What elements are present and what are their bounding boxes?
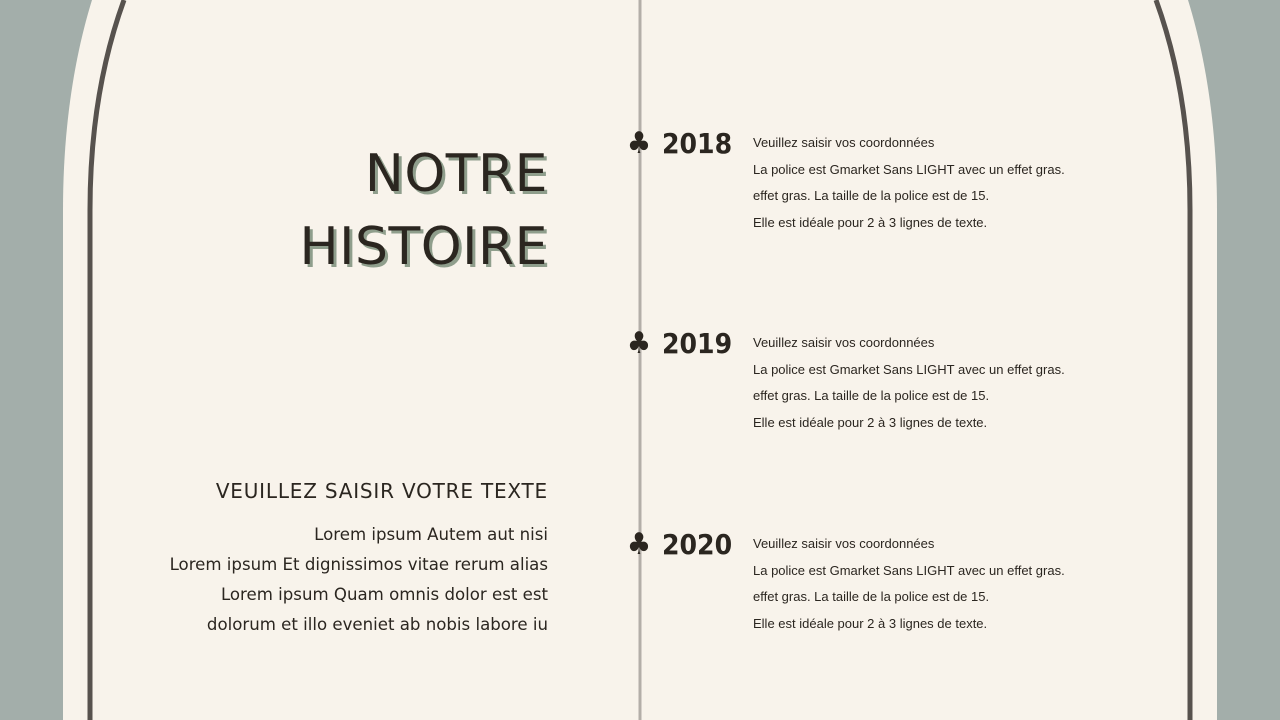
year 2018 xyxy=(627,126,732,161)
desc 2018: effet gras. La taille de la police est de 15. xyxy=(753,188,989,203)
year 2018: ♣ xyxy=(627,126,651,161)
desc 2018: La police est Gmarket Sans LIGHT avec un effet gras. xyxy=(753,162,1065,177)
desc 2019: La police est Gmarket Sans LIGHT avec un effet gras. xyxy=(753,362,1065,377)
desc 2019: effet gras. La taille de la police est de 15. xyxy=(753,388,989,403)
body text: dolorum et illo eveniet ab nobis labore iu xyxy=(207,615,548,634)
desc 2020: Veuillez saisir vos coordonnées xyxy=(753,536,934,551)
desc 2019 xyxy=(753,335,1065,430)
body text xyxy=(170,525,548,634)
year 2018: 2018 xyxy=(662,127,732,160)
body text: Lorem ipsum Quam omnis dolor est est xyxy=(221,585,548,604)
body text: Lorem ipsum Et dignissimos vitae rerum alias xyxy=(170,555,548,574)
year 2019 xyxy=(627,326,732,361)
body text: Lorem ipsum Autem aut nisi xyxy=(314,525,548,544)
title: NOTRE xyxy=(365,144,548,204)
year 2019: 2019 xyxy=(662,327,732,360)
subtitle: VEUILLEZ SAISIR VOTRE TEXTE xyxy=(216,479,548,503)
year 2020: ♣ xyxy=(627,527,651,562)
year 2020 xyxy=(627,527,732,562)
desc 2020: Elle est idéale pour 2 à 3 lignes de texte. xyxy=(753,616,987,631)
desc 2018: Elle est idéale pour 2 à 3 lignes de texte. xyxy=(753,215,987,230)
desc 2020: La police est Gmarket Sans LIGHT avec un effet gras. xyxy=(753,563,1065,578)
title xyxy=(300,144,548,277)
title: HISTOIRE xyxy=(300,217,548,277)
desc 2019: Veuillez saisir vos coordonnées xyxy=(753,335,934,350)
desc 2019: Elle est idéale pour 2 à 3 lignes de texte. xyxy=(753,415,987,430)
desc 2018: Veuillez saisir vos coordonnées xyxy=(753,135,934,150)
year 2019: ♣ xyxy=(627,326,651,361)
desc 2020 xyxy=(753,536,1065,631)
desc 2018 xyxy=(753,135,1065,230)
year 2020: 2020 xyxy=(662,528,732,561)
desc 2020: effet gras. La taille de la police est de 15. xyxy=(753,589,989,604)
